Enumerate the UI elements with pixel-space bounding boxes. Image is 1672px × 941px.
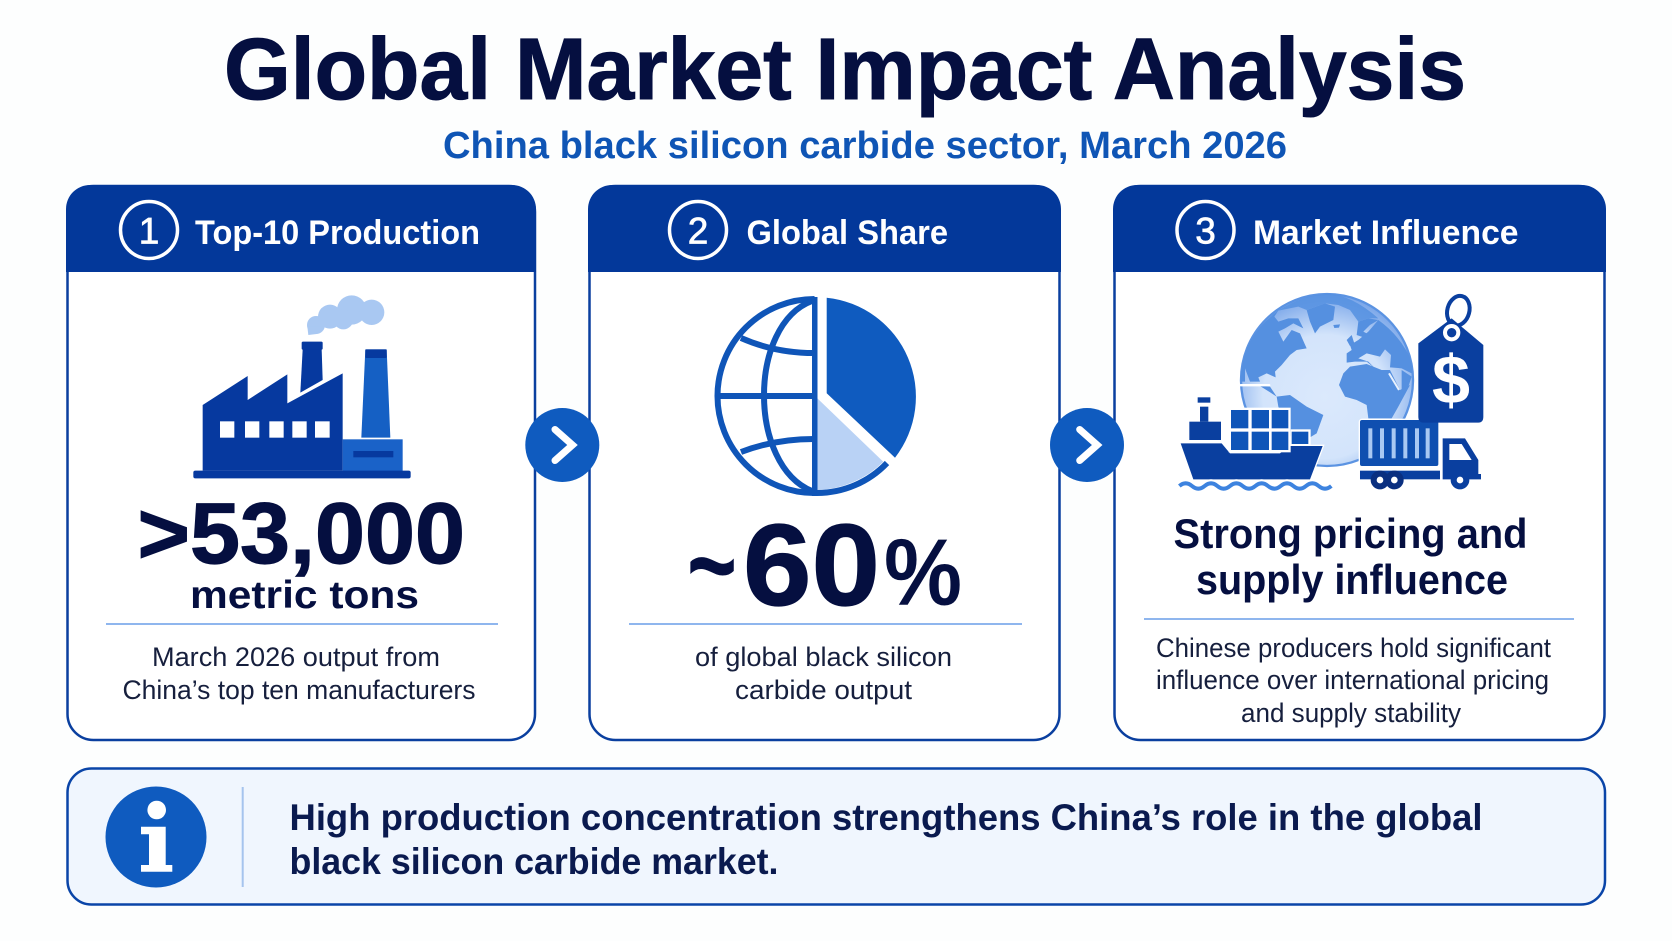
- price tag: [1418, 293, 1483, 423]
- icon: ship, truck and price tag: [1179, 293, 1483, 489]
- icon: factory: [193, 295, 411, 478]
- heading: global share: Global Share: [746, 214, 948, 252]
- metric: ~60%: [687, 500, 962, 630]
- description: and supply stability: [1241, 698, 1461, 728]
- number badge 2: [670, 202, 726, 258]
- description: Chinese producers hold significant: [1156, 633, 1551, 663]
- description: of global black silicon: [695, 642, 952, 672]
- number badge 1: 1: [139, 210, 159, 252]
- metric: ~60%: %: [884, 520, 962, 626]
- statement: strong pricing and supply influence: Strong pricing and: [1174, 510, 1528, 557]
- number badge 3: [1177, 202, 1234, 258]
- number badge 2: 2: [688, 210, 708, 252]
- price tag: $: [1432, 342, 1470, 418]
- description: March 2026 output from: [152, 642, 440, 672]
- ship: [1179, 397, 1331, 489]
- arrow: card 2 to card 3: [1050, 408, 1124, 482]
- description: influence over international pricing: [1156, 665, 1549, 695]
- globe: [1240, 294, 1413, 466]
- description: carbide output: [735, 675, 913, 705]
- heading: market influence: Market Influence: [1253, 214, 1518, 252]
- callout: key takeaway: [68, 768, 1605, 904]
- title: Global Market Impact Analysis: [224, 21, 1466, 118]
- takeaway text: High production concentration strengthens China’s role in the global: [290, 797, 1482, 838]
- metric: >53,000: >53,000: [138, 486, 465, 582]
- panel: top-10 production: [66, 185, 536, 740]
- icon: globe and pie chart: [717, 297, 916, 496]
- subtitle: China black silicon carbide sector, March 2026: [443, 125, 1287, 167]
- takeaway text: black silicon carbide market.: [290, 841, 778, 882]
- truck: [1360, 420, 1481, 486]
- panel: global share: [588, 185, 1061, 740]
- description: [695, 642, 952, 705]
- icon: info: [106, 786, 206, 888]
- description: China’s top ten manufacturers: [122, 675, 476, 705]
- panel: market influence: [1113, 185, 1606, 740]
- number badge 1: [120, 202, 178, 258]
- description: [122, 642, 476, 705]
- unit: metric tons: metric tons: [190, 574, 419, 617]
- statement: strong pricing and supply influence: supply influence: [1196, 556, 1508, 603]
- arrow: card 1 to card 2: [525, 408, 599, 482]
- metric: ~60%: 60: [743, 500, 880, 630]
- metric: ~60%: ~: [687, 500, 737, 630]
- number badge 3: 3: [1195, 210, 1216, 252]
- takeaway text: [290, 797, 1482, 882]
- heading: top-10 production: Top-10 Production: [195, 214, 480, 252]
- description: [1156, 633, 1551, 728]
- statement: strong pricing and supply influence: [1174, 510, 1528, 603]
